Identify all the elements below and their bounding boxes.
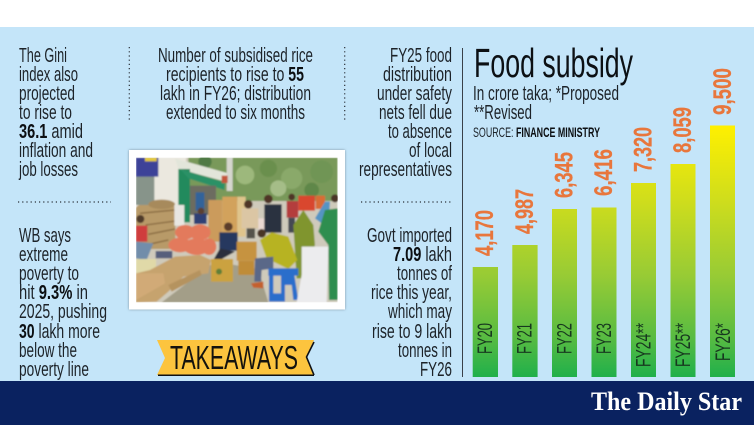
text block: rice imports: rice this year, [371,281,452,304]
footer band [0,381,754,425]
bar FY24: FY24** [632,323,656,367]
text block: Gini index [18,44,93,181]
heading: Food subsidy: Food subsidy [474,40,633,86]
bar FY21: FY21 [512,323,536,354]
chart subtitle: In crore taka; *Proposed [473,82,619,105]
text block: subsidised rice recipients: lakh in FY26; distribution [160,82,311,105]
text block: FY25 food distribution: to absence [388,120,452,143]
text block: extreme poverty: poverty line [19,358,89,381]
text block: rice imports: which may [387,300,452,323]
text block: FY25 food distribution: representatives [359,158,452,181]
bar FY23: FY23 [592,323,616,354]
text block: subsidised rice recipients: Number of subsidised rice [158,44,313,67]
text block: extreme poverty: extreme [19,243,68,266]
text block: extreme poverty: 2025, pushing [19,300,107,323]
text block: rice imports: Govt imported [367,224,452,247]
text block: rice imports: tonnes in [398,339,452,362]
bar FY23: 6,416 [590,149,618,196]
bar FY20: FY20 [473,323,497,354]
logo: The Daily Star: The Daily Star [591,387,742,416]
text block: rice imports: 7.09 lakh [393,243,452,266]
text block: FY25 food distribution: nets fell due [379,101,452,124]
bar FY20: 4,170 [471,210,499,256]
text block: extreme poverty: hit 9.3% in [19,281,88,304]
text block: FY25 food distribution: of local [409,139,452,162]
text block: FY25 food distribution: distribution [383,63,452,86]
text block: FY25 food distribution [359,44,452,181]
text block: Gini index: 36.1 amid [19,120,83,143]
bar FY21 [511,189,539,377]
text block: FY25 food distribution: FY25 food [390,44,452,67]
banner: TAKEAWAYS [157,339,314,376]
bar FY25: 8,059 [669,107,697,153]
bar FY22: 6,345 [550,152,578,198]
text block: extreme poverty: poverty to [19,262,79,285]
bar FY21: 4,987 [511,189,539,234]
text block: extreme poverty: 30 lakh more [19,320,100,343]
bar FY25 [669,107,697,377]
bar FY22 [550,152,578,377]
text block: extreme poverty: below the [19,339,77,362]
text block: Gini index: index also [19,63,78,86]
text block: rice imports: rise to 9 lakh [372,320,452,343]
chart subtitle: **Revised [474,101,532,124]
photo: food distribution scene in white frame [129,150,345,310]
bar FY26 [709,68,737,377]
text block: rice imports: tonnes of [397,262,452,285]
text block: Gini index: The Gini [19,44,67,67]
text block: Gini index: projected [19,82,75,105]
bar FY26: 9,500 [709,68,737,115]
source note: SOURCE: FINANCE MINISTRY [473,124,600,140]
chart subtitle [473,82,619,124]
text block: Gini index: inflation and [19,139,93,162]
text block: Gini index: job losses [18,158,78,181]
banner: TAKEAWAYS: TAKEAWAYS [170,339,298,376]
text block: rice imports [367,224,452,381]
text block: subsidised rice recipients [158,44,313,124]
bar FY24 [630,127,658,377]
text block: subsidised rice recipients: recipients to rise to 55 [166,63,304,86]
bar FY20 [471,210,499,377]
text block: rice imports: FY26 [420,358,452,381]
bar FY24: 7,320 [630,127,658,172]
text block: subsidised rice recipients: extended to six months [166,101,305,124]
bar chart: food subsidy by fiscal year [471,68,737,377]
bar FY22: FY22 [552,323,576,354]
bar FY23 [590,149,618,377]
text block: extreme poverty [19,224,107,381]
bar FY25: FY25** [671,323,695,367]
bar FY26: FY26* [711,323,735,361]
text block: extreme poverty: WB says [19,224,71,247]
text block: FY25 food distribution: under safety [377,82,452,105]
text block: Gini index: to rise to [19,101,72,124]
